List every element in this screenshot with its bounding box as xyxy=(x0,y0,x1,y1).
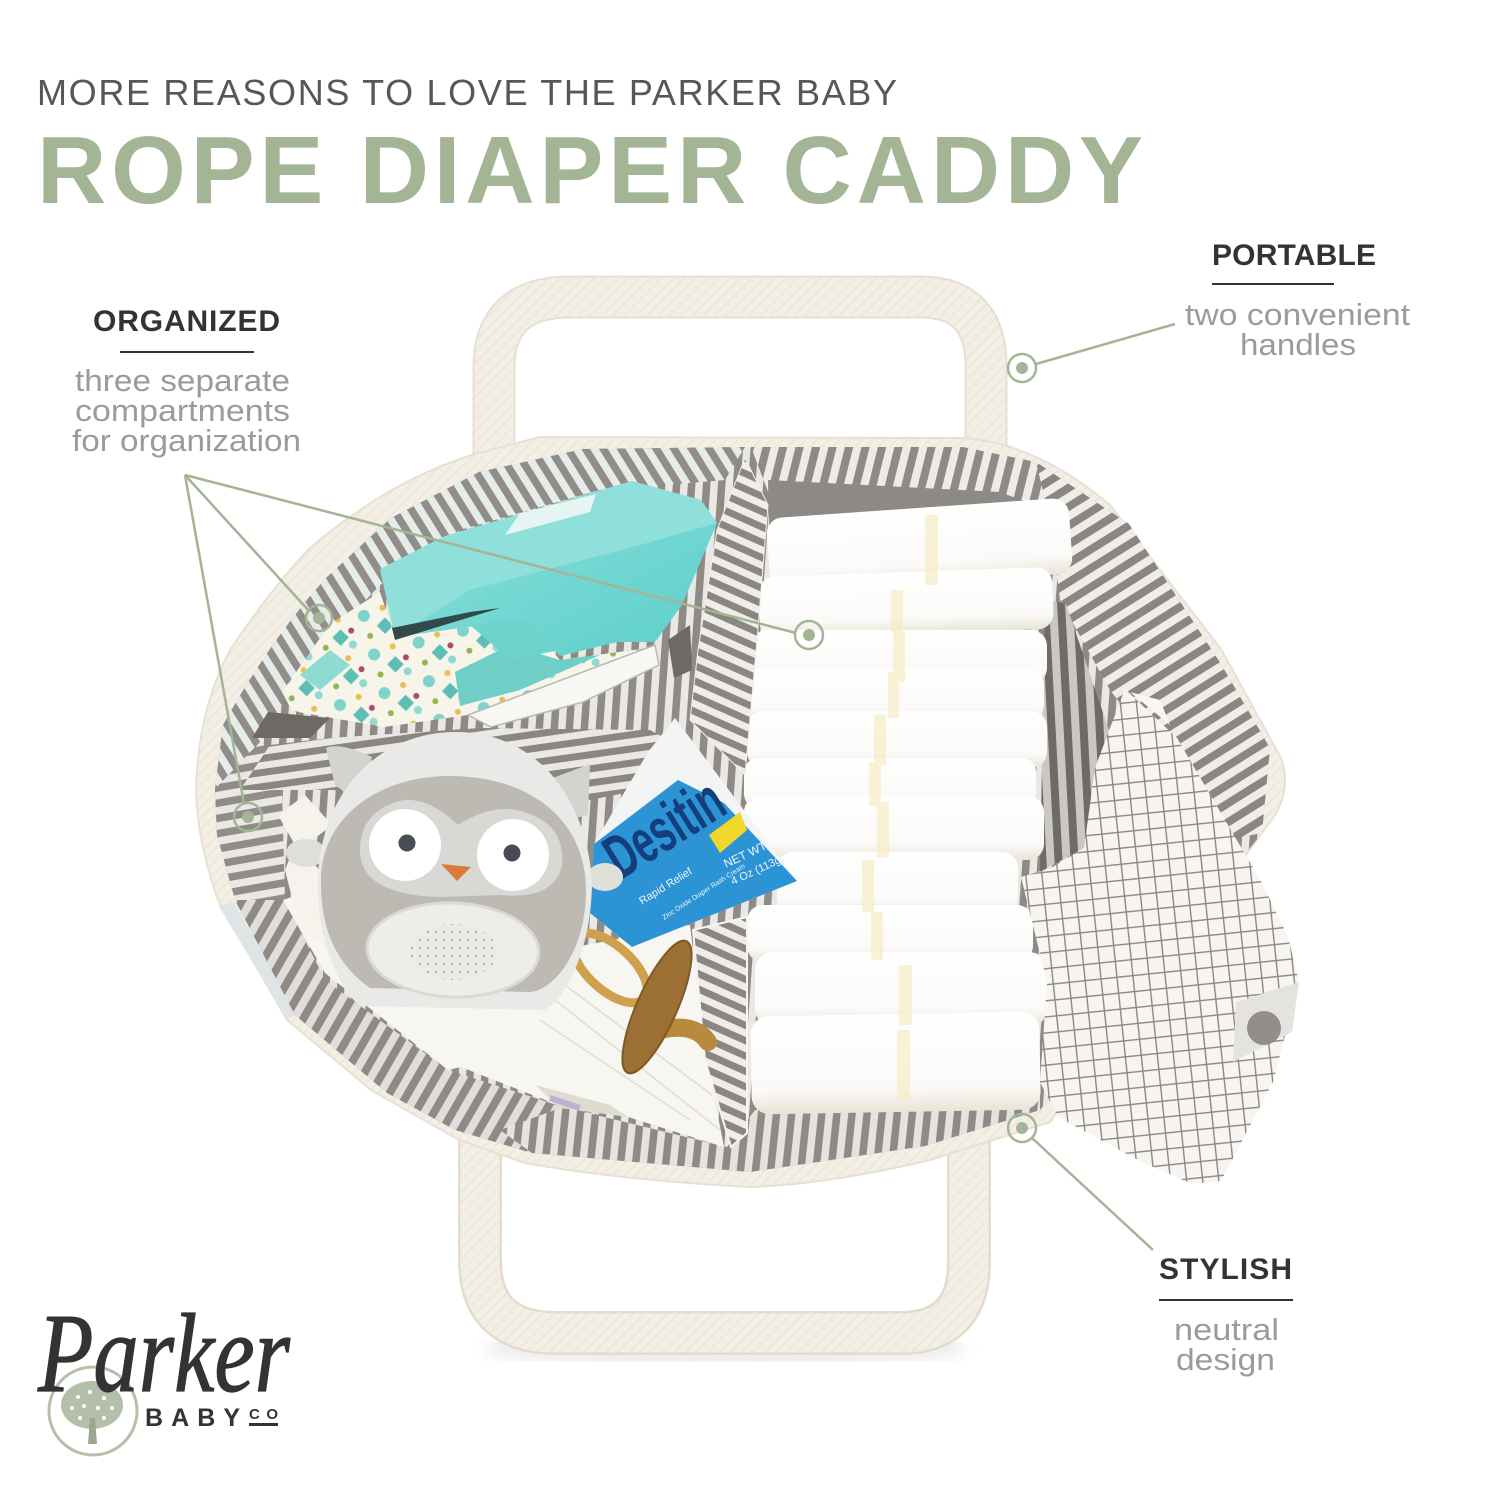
owl wings xyxy=(286,839,326,867)
lining: top wall xyxy=(751,447,1070,510)
callout text: organized: for organization xyxy=(72,423,301,458)
callout dot: upper left compartment xyxy=(306,605,332,631)
callout text: stylish: STYLISH xyxy=(1159,1253,1292,1286)
logo: Parker Baby Co xyxy=(37,1292,290,1455)
shadow above diapers xyxy=(768,480,1060,600)
logo co: CO xyxy=(249,1406,278,1423)
item: cream tube: Desitin xyxy=(591,764,737,891)
item: wipes lid xyxy=(468,645,659,727)
callout text: organized xyxy=(72,305,301,458)
item: cream tube: Rapid Relief xyxy=(637,865,695,908)
owl eyes xyxy=(369,809,441,881)
callout lines xyxy=(185,324,1175,1250)
item: grid cloth with tag xyxy=(1021,689,1299,1184)
shadow at left compartment xyxy=(252,712,330,738)
item: wipes pouch, teal xyxy=(380,481,717,660)
item: cream tube: 4 Oz (113g) xyxy=(729,853,786,888)
item: owl sound machine xyxy=(286,732,623,1010)
item: wipes pouch, floral xyxy=(282,592,655,727)
owl face mask xyxy=(360,800,562,897)
item: folded white cloths and loose diaper xyxy=(278,795,724,1147)
product: rope diaper caddy xyxy=(196,297,1299,1358)
lining: middle cross wall xyxy=(240,728,705,800)
callout dot: divider xyxy=(795,621,823,649)
logo badge with tree xyxy=(49,1367,137,1455)
lining: center divider, lower xyxy=(693,917,747,1147)
callout text: organized: three separate xyxy=(75,363,290,398)
logo subtext: BABY xyxy=(145,1404,240,1432)
callout text: stylish: neutral xyxy=(1174,1312,1279,1347)
lining: lower left wall xyxy=(235,900,600,1153)
callout text: portable xyxy=(1185,239,1410,362)
lining: striped full interior xyxy=(215,447,1270,1172)
owl ears xyxy=(326,746,372,802)
item: cream tube xyxy=(590,718,797,947)
basket rim pale patch xyxy=(218,903,296,1020)
lining: back of left compartment xyxy=(560,630,700,745)
handle: top rope handle xyxy=(494,297,986,480)
lining: right pocket xyxy=(1040,600,1110,872)
callout text: portable: two convenient xyxy=(1185,297,1410,332)
cloth tag xyxy=(1233,982,1299,1062)
lining: center divider, upper xyxy=(690,458,768,775)
item: diaper stack xyxy=(744,497,1073,1115)
logo wordmark: Parker xyxy=(37,1292,290,1416)
item: cream tube: NET WT xyxy=(721,838,769,871)
item: cream tube: Zinc Oxide Diaper Rash Cream xyxy=(661,863,747,922)
owl beak xyxy=(441,864,471,881)
handle: bottom rope handle xyxy=(480,1130,969,1333)
basket outer rope rim xyxy=(196,437,1285,1187)
owl speaker xyxy=(365,900,541,1000)
title: main heading: ROPE DIAPER CADDY xyxy=(37,117,1143,224)
callout text: portable: handles xyxy=(1240,327,1356,362)
callout dot: handle xyxy=(1008,354,1036,382)
item: pacifier xyxy=(561,921,708,1081)
callout text: stylish xyxy=(1159,1253,1293,1377)
callout text: portable: PORTABLE xyxy=(1212,239,1376,272)
lining: bottom wall xyxy=(500,1095,1040,1172)
callout dot: lower left compartment xyxy=(234,803,262,831)
owl felt body xyxy=(321,776,586,992)
lining: left wall xyxy=(215,740,325,1015)
lining: upper left wall xyxy=(215,447,745,789)
callout text: organized: compartments xyxy=(75,393,290,428)
lining: upper right wall xyxy=(1036,462,1270,840)
owl shell xyxy=(318,732,592,1010)
callout dot: lining xyxy=(1008,1114,1036,1142)
title: subheading: MORE REASONS TO LOVE THE PARKER BABY xyxy=(37,72,897,113)
callout text: organized: ORGANIZED xyxy=(93,305,280,338)
callout text: stylish: design xyxy=(1176,1342,1275,1377)
